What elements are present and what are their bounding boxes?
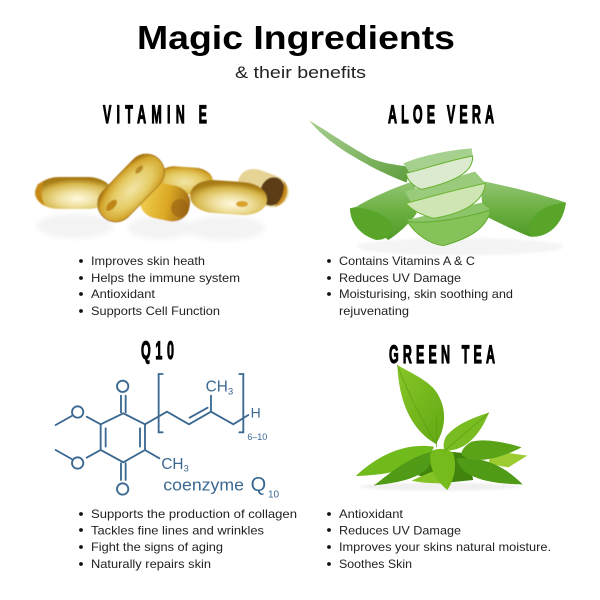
list: vitamin e benefits: Supports Cell Function bbox=[91, 305, 220, 318]
panel: aloe vera bbox=[309, 101, 566, 318]
diagram: coenzyme q10 molecule: 3 bbox=[184, 464, 189, 474]
list: aloe vera benefits: Moisturising, skin soothing and bbox=[339, 288, 513, 301]
diagram: coenzyme q10 molecule: Q bbox=[251, 474, 266, 496]
list: vitamin e benefits: Antioxidant bbox=[91, 288, 156, 301]
list: green tea benefits: Reduces UV Damage bbox=[339, 524, 461, 538]
list: q10 benefits: Supports the production of collagen bbox=[91, 508, 297, 521]
heading: vitamin e: VITAMIN E bbox=[103, 101, 207, 129]
list: green tea benefits: Soothes Skin bbox=[339, 558, 412, 571]
list: q10 benefits bbox=[79, 508, 297, 571]
diagram: coenzyme q10 molecule bbox=[56, 374, 280, 500]
list: q10 benefits: Fight the signs of aging bbox=[91, 541, 223, 554]
panel: vitamin e bbox=[35, 101, 293, 318]
diagram: coenzyme q10 molecule: 3 bbox=[228, 386, 233, 396]
diagram: coenzyme q10 molecule: 10 bbox=[268, 489, 280, 500]
panel: green tea bbox=[327, 341, 551, 571]
diagram: coenzyme q10 molecule: 6–10 bbox=[247, 432, 267, 442]
diagram: coenzyme q10 molecule: CH bbox=[206, 379, 228, 396]
heading: green tea: GREEN TEA bbox=[389, 341, 495, 369]
heading: q10: Q10 bbox=[141, 337, 174, 365]
list: vitamin e benefits: Improves skin heath bbox=[91, 255, 205, 268]
panel: q10 bbox=[56, 337, 297, 571]
heading: aloe vera: ALOE VERA bbox=[388, 101, 494, 129]
image: aloe vera leaves bbox=[309, 121, 566, 255]
title: Magic Ingredients bbox=[137, 20, 455, 57]
list: green tea benefits: Improves your skins natural moisture. bbox=[339, 541, 551, 554]
list: aloe vera benefits: rejuvenating bbox=[339, 305, 409, 318]
image: vitamin e capsules bbox=[35, 147, 293, 240]
list: q10 benefits: Tackles fine lines and wrinkles bbox=[91, 524, 264, 538]
list: aloe vera benefits: Contains Vitamins A & C bbox=[339, 255, 475, 268]
list: aloe vera benefits: Reduces UV Damage bbox=[339, 272, 461, 285]
list: aloe vera benefits bbox=[327, 255, 513, 318]
image: green tea leaves bbox=[356, 365, 527, 491]
list: vitamin e benefits: Helps the immune system bbox=[91, 272, 240, 285]
subtitle: & their benefits bbox=[235, 63, 366, 82]
list: green tea benefits bbox=[327, 508, 551, 571]
diagram: coenzyme q10 molecule: CH bbox=[161, 456, 183, 473]
list: vitamin e benefits bbox=[79, 255, 240, 318]
list: green tea benefits: Antioxidant bbox=[339, 508, 404, 521]
diagram: coenzyme q10 molecule: H bbox=[251, 404, 261, 420]
diagram: coenzyme q10 molecule: coenzyme bbox=[163, 476, 244, 495]
list: q10 benefits: Naturally repairs skin bbox=[91, 558, 211, 571]
